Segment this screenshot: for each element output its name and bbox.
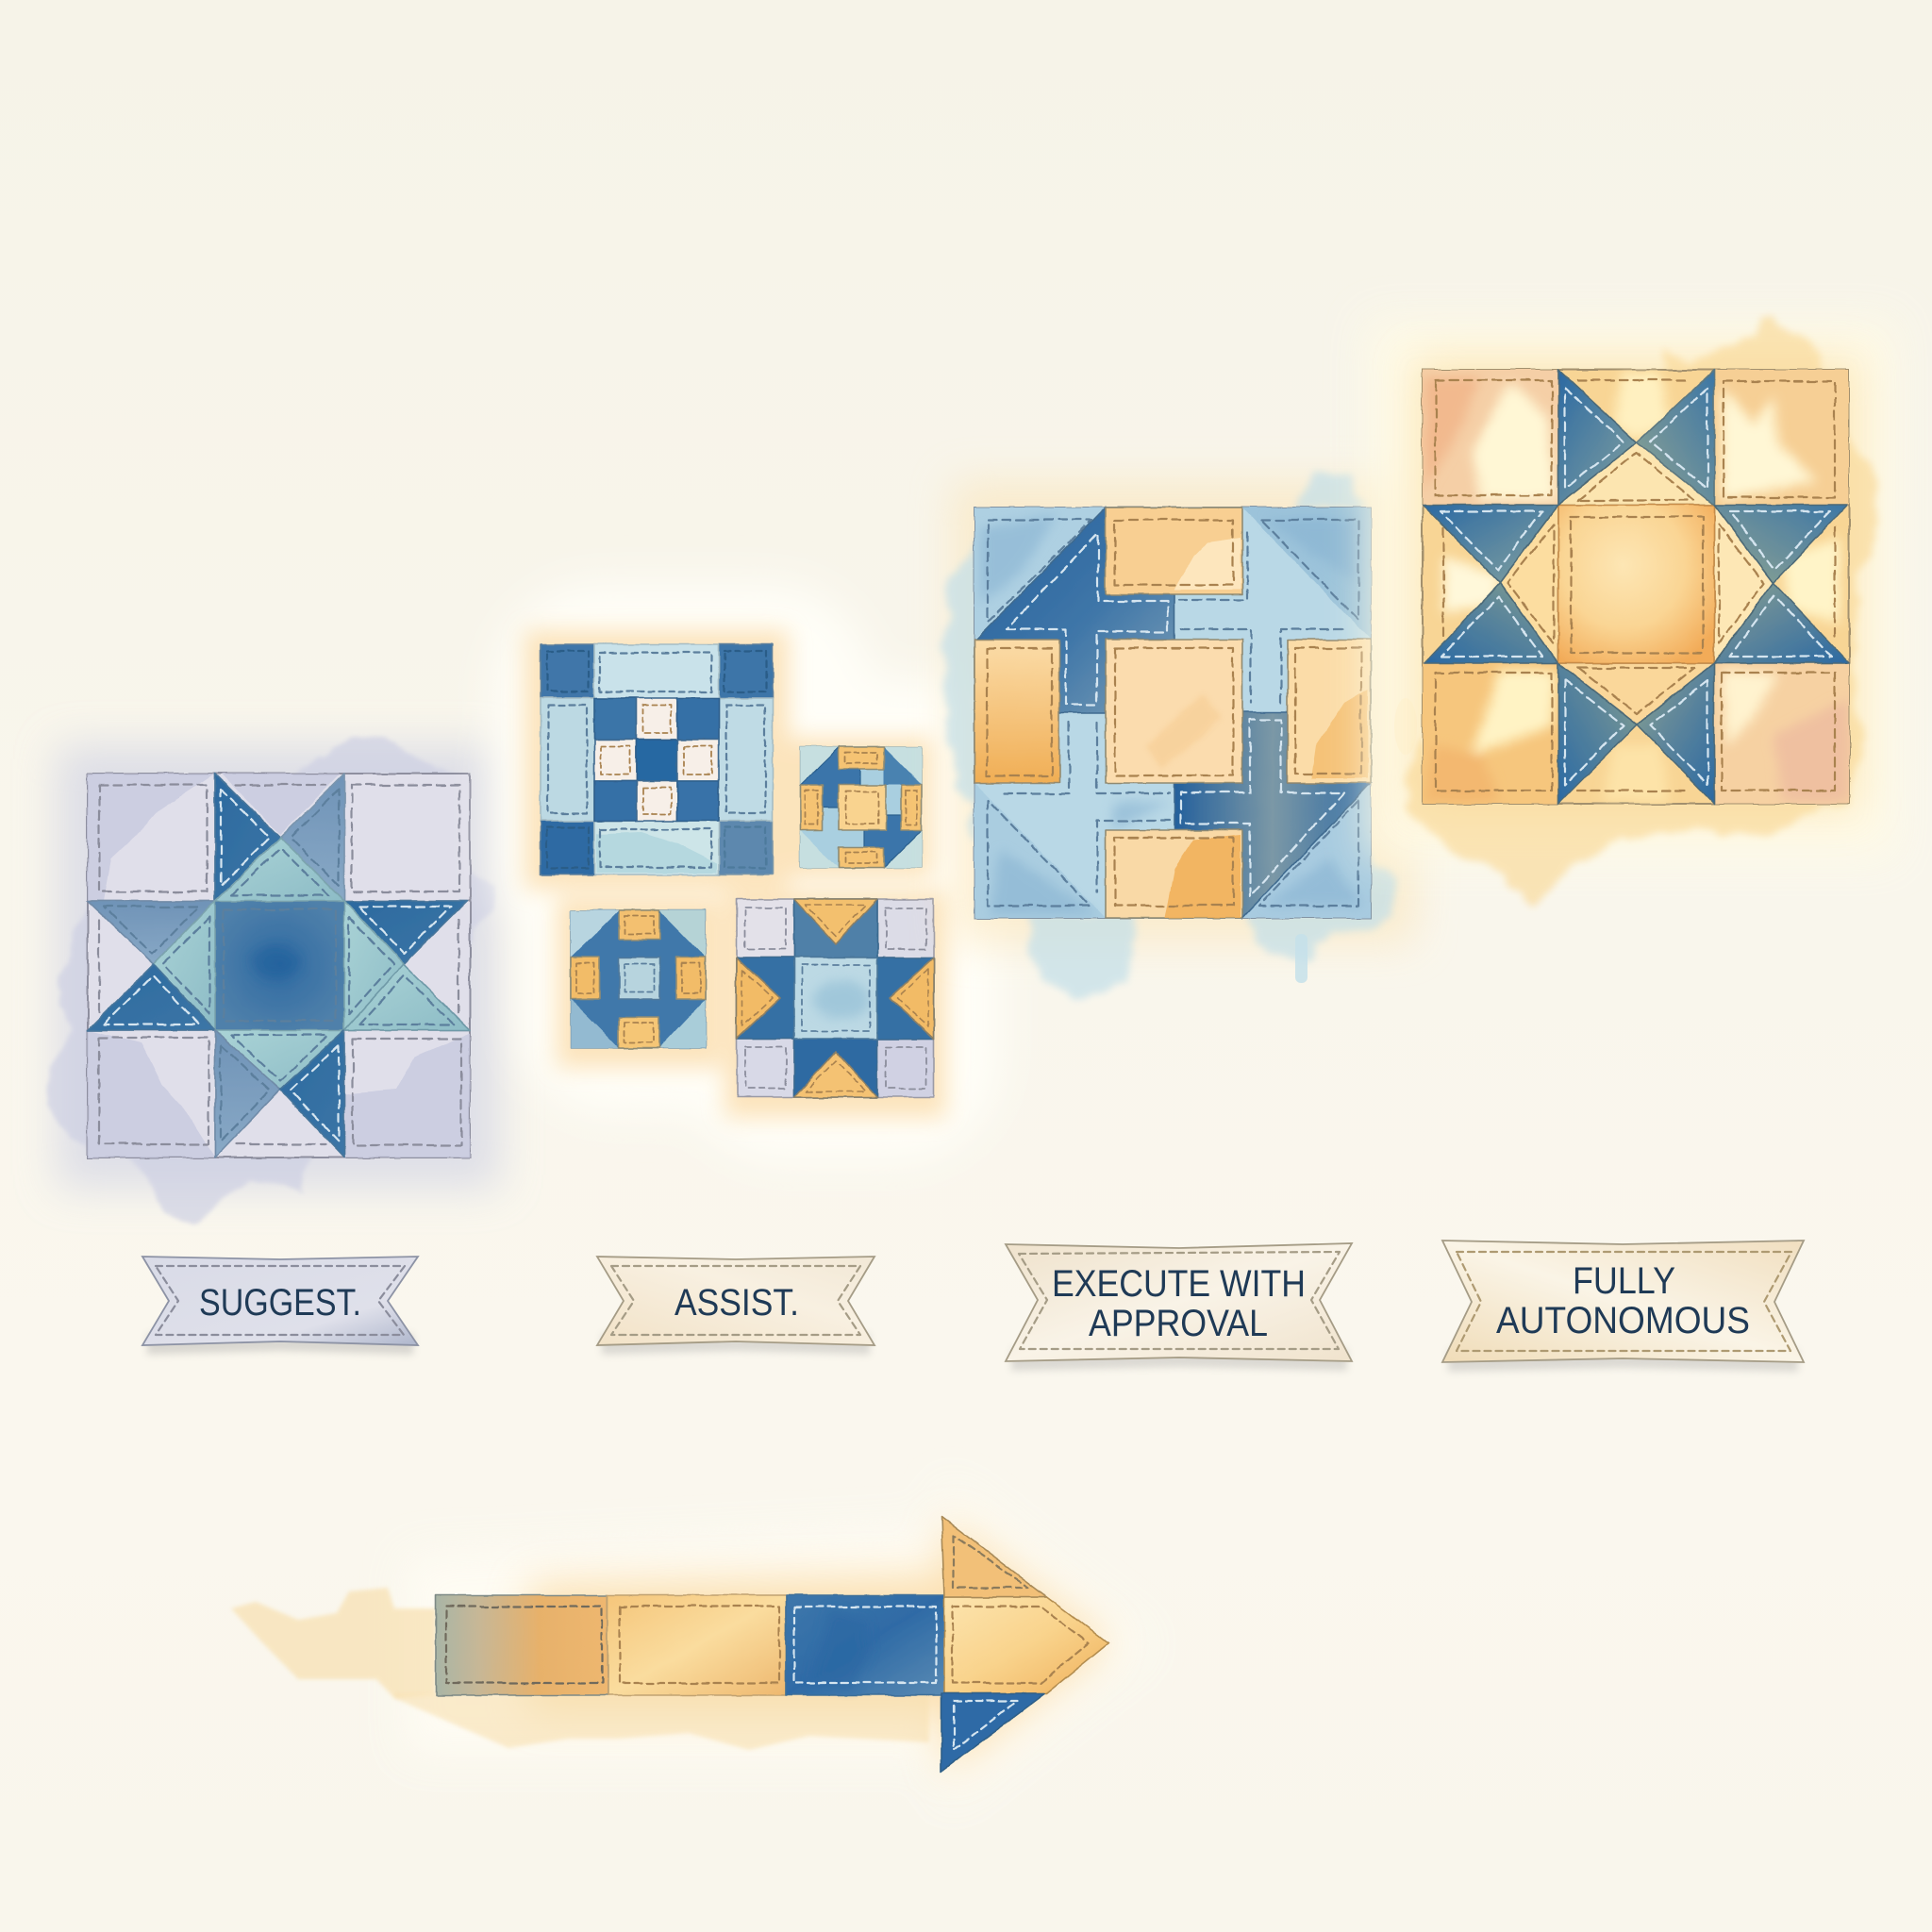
dark blue arrow pieces <box>976 508 1371 918</box>
quilt block: Assist small churn dash with gold center <box>800 747 922 868</box>
quilt block: Assist small churn dash with blue cross <box>571 910 706 1048</box>
quilt block: Execute with approval churn dash <box>974 508 1371 918</box>
star point triangles <box>88 774 470 1158</box>
watercolor wash: blue and gold behind Execute block <box>943 472 1417 1000</box>
arrow shaft patch: bright gold <box>608 1595 786 1695</box>
quilt block: Assist nine-patch <box>541 644 773 874</box>
arrowhead bottom triangle <box>941 1693 1045 1772</box>
arrowhead top triangle <box>941 1517 1047 1597</box>
ribbon label: Assist <box>597 1257 874 1355</box>
ribbon label: Fully autonomous: AUTONOMOUS <box>1496 1300 1750 1341</box>
watercolor wash: gold trail behind arrow <box>231 1481 1151 1807</box>
ribbon label: Execute with approval: APPROVAL <box>1089 1303 1268 1344</box>
arrow shaft patch: blue <box>786 1595 944 1695</box>
ribbon label: Assist: ASSIST. <box>675 1282 799 1324</box>
stitching <box>99 785 461 1145</box>
stitching <box>987 520 1361 906</box>
gold background patches <box>1423 370 1849 804</box>
ribbon label: Fully autonomous: FULLY <box>1573 1260 1675 1302</box>
stitching <box>1436 380 1835 791</box>
ribbon label: Fully autonomous <box>1442 1241 1804 1372</box>
quilt block: Fully autonomous sawtooth star <box>1423 370 1849 804</box>
ribbon label: Suggest <box>142 1257 418 1355</box>
ribbon label: Execute with approval: EXECUTE WITH <box>1052 1263 1306 1305</box>
watercolor wash: lavender behind Suggest block <box>47 738 500 1222</box>
quilt block: Assist star with gold points <box>737 899 934 1097</box>
light blue cross and corners <box>974 508 1371 918</box>
quilt block: Suggest sawtooth star <box>88 774 470 1158</box>
arrowhead center patch <box>944 1597 1108 1693</box>
gold patches <box>974 508 1371 918</box>
center square <box>215 901 344 1030</box>
watercolor wash: gold behind Fully Autonomous block <box>1368 316 1896 910</box>
ribbon label: Suggest: SUGGEST. <box>199 1282 361 1324</box>
arrow made of quilt patches <box>436 1517 1108 1772</box>
background patches <box>88 774 470 1158</box>
glow halo: Assist block cluster <box>495 585 1028 1160</box>
ribbon label: Execute with approval <box>1006 1243 1352 1371</box>
center gold square and cream triangles <box>1500 442 1774 724</box>
blue star points <box>1423 370 1849 804</box>
arrow shaft patch: faded gold <box>436 1595 608 1695</box>
